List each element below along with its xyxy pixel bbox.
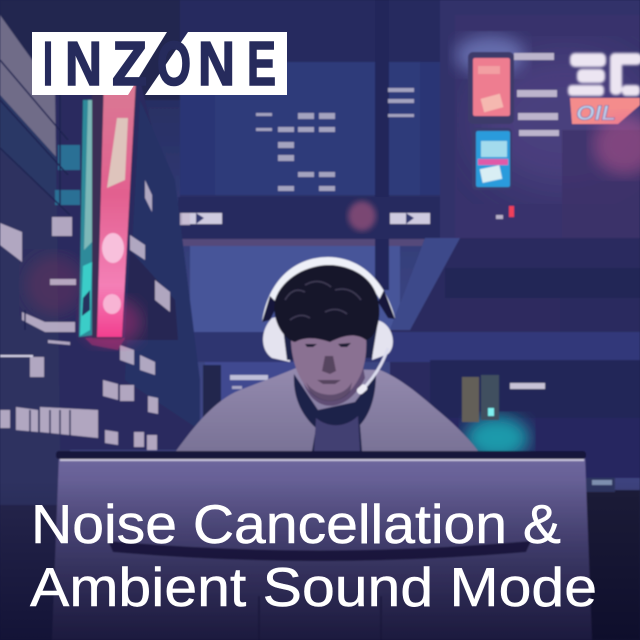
- INZONE logo: [32, 30, 287, 99]
- eyes: [305, 343, 351, 347]
- beard shadow: [306, 382, 352, 401]
- INZONE logo: E: [247, 30, 276, 99]
- bottom shade: [0, 480, 640, 640]
- right dark building: [380, 0, 640, 478]
- INZONE logo: I: [43, 30, 53, 99]
- traffic light with teal glow: [462, 375, 529, 460]
- hair texture: [285, 281, 361, 320]
- title: Noise Cancellation &: [31, 493, 561, 555]
- glowing billboards and OIL neon sign: OIL: [576, 102, 616, 125]
- left apartment building: [0, 0, 200, 520]
- INZONE logo: Z: [112, 30, 147, 99]
- microphone boom: [356, 348, 388, 396]
- title: Ambient Sound Mode: [30, 556, 597, 618]
- title: [30, 493, 597, 618]
- monitor: [52, 451, 592, 640]
- vertical neon signs on building: [79, 78, 142, 350]
- hair: [274, 265, 379, 342]
- shirt: [176, 368, 478, 451]
- centre skybridge: [178, 197, 440, 239]
- floor and distant street: [0, 478, 640, 640]
- headband: [262, 257, 395, 322]
- face: [291, 335, 366, 401]
- INZONE logo: O: [157, 30, 191, 99]
- right earcup: [372, 320, 393, 360]
- left earcup: [263, 315, 290, 362]
- INZONE logo: N: [198, 30, 235, 99]
- glowing billboards and OIL neon sign: [455, 35, 640, 219]
- undershirt: [314, 416, 360, 451]
- person with headset: [176, 257, 478, 451]
- t-shirt and collar: [294, 374, 376, 451]
- building windows, centre: [230, 88, 414, 389]
- neck: [302, 360, 365, 406]
- INZONE logo: N: [65, 30, 102, 99]
- headband pads: [262, 290, 395, 322]
- nose and mouth: [317, 356, 341, 384]
- ear cushions: [282, 320, 378, 360]
